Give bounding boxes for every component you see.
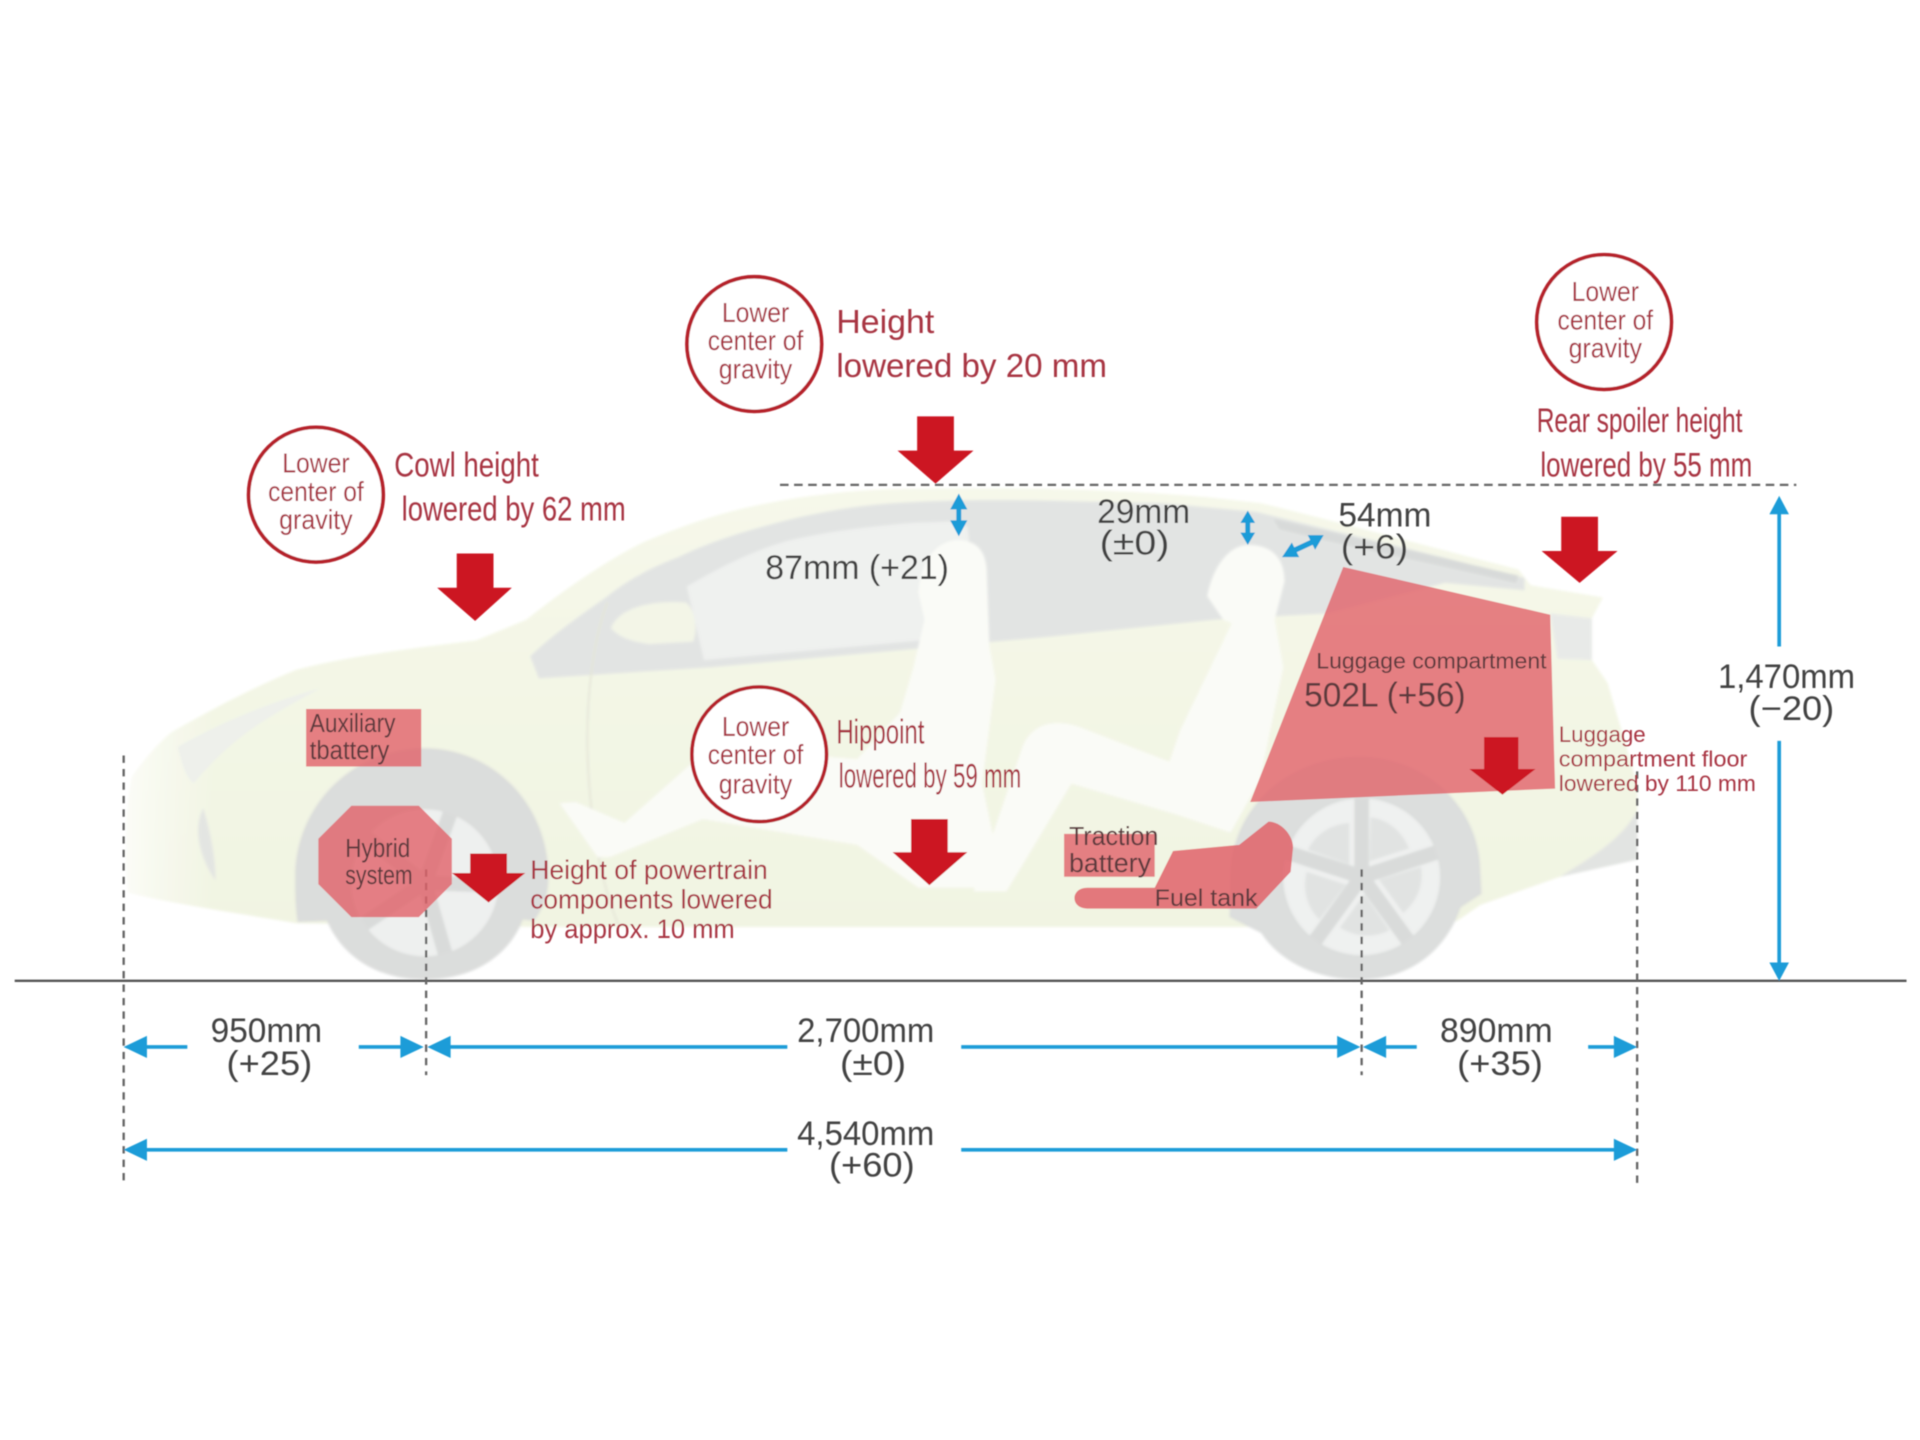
heading line 1: Height <box>836 304 934 341</box>
overall length dimension <box>124 1115 1637 1185</box>
component: hybrid system <box>318 806 452 917</box>
headroom: front <box>765 493 967 587</box>
component: auxiliary battery <box>306 709 421 767</box>
callout: cowl height <box>249 427 626 621</box>
front door line <box>587 602 618 924</box>
diagram group <box>15 255 1907 1185</box>
value: 1,470mm <box>1718 658 1855 696</box>
value: 890mm <box>1440 1012 1553 1050</box>
label: hybrid system: system <box>345 862 413 890</box>
double arrow <box>1240 511 1255 545</box>
badge text: Lower <box>722 297 789 328</box>
heading line 2: lowered by 55 mm <box>1540 446 1752 484</box>
value: (±0) <box>1100 525 1169 563</box>
car: pale side-view silhouette <box>126 488 1637 980</box>
overall height dashed reference <box>780 484 1796 486</box>
badge text: center of <box>1558 304 1653 335</box>
component: traction battery <box>1064 834 1155 877</box>
rear wheel arch and tyre <box>1229 757 1482 980</box>
right arrow <box>1588 1036 1637 1058</box>
value: (+60) <box>829 1147 915 1185</box>
rear wheel <box>1229 757 1482 980</box>
headlamp <box>178 688 321 784</box>
rear knee clearance <box>1282 497 1431 566</box>
heading line 1: Rear spoiler height <box>1537 402 1743 440</box>
value: (+35) <box>1457 1045 1543 1083</box>
lower arrow <box>1769 741 1789 981</box>
heading line 2: lowered by 59 mm <box>839 757 1021 795</box>
callout: rear spoiler height <box>1537 255 1752 583</box>
callout: overall height lowered <box>687 277 1107 484</box>
wheelbase dimension <box>427 1012 1360 1083</box>
value: 29mm <box>1097 493 1190 531</box>
rear bumper shade <box>1560 811 1637 877</box>
front spokes <box>360 811 499 956</box>
dimension guide: rear axle <box>1361 869 1363 1075</box>
right arrow <box>359 1036 424 1058</box>
badge text: gravity <box>719 768 793 799</box>
callout: luggage floor <box>1469 722 1756 796</box>
callout: hip point <box>692 687 1021 885</box>
front overhang dimension <box>124 1012 424 1083</box>
front wheel arch and tyre <box>295 748 549 980</box>
front bumper intake <box>198 808 216 880</box>
dimension guide: front axle <box>425 869 427 1075</box>
tail lamp <box>1550 613 1592 660</box>
front occupant silhouette <box>560 540 1004 888</box>
rear rim pockets <box>1294 809 1437 952</box>
label: traction battery: Traction <box>1069 823 1158 851</box>
heading line 1: Cowl height <box>394 446 539 484</box>
double arrow <box>950 493 967 536</box>
windshield and side glass band <box>530 500 1524 678</box>
callout text: by approx. 10 mm <box>530 914 735 944</box>
rear overhang dimension <box>1363 1012 1637 1083</box>
rear window highlight strip <box>1273 519 1518 583</box>
front wheel <box>295 748 549 980</box>
label: auxiliary battery: tbattery <box>310 737 390 765</box>
badge text: gravity <box>719 353 793 384</box>
callout text: Luggage <box>1559 722 1646 747</box>
red down arrow <box>452 853 525 902</box>
value: 2,700mm <box>797 1012 934 1050</box>
callout text: Height of powertrain <box>530 855 768 885</box>
car body <box>126 488 1637 927</box>
label: traction battery: battery <box>1069 850 1151 878</box>
front rim <box>351 809 498 956</box>
red down arrow <box>1542 517 1618 583</box>
badge text: Lower <box>1572 276 1639 307</box>
rear spokes <box>1285 798 1438 944</box>
side mirror <box>611 602 696 644</box>
front door window <box>687 522 980 660</box>
callout text: lowered by 110 mm <box>1559 771 1756 796</box>
diagonal double arrow <box>1282 535 1324 557</box>
value: (±0) <box>840 1045 906 1083</box>
right arrow <box>961 1139 1637 1161</box>
overall height dimension <box>1718 496 1855 981</box>
badge text: gravity <box>1569 333 1643 364</box>
badge circle <box>1537 255 1671 389</box>
red down arrow <box>437 553 512 621</box>
badge text: Lower <box>722 711 789 742</box>
right arrow <box>961 1036 1360 1058</box>
value: 54mm <box>1338 497 1431 535</box>
badge circle <box>687 277 822 411</box>
rear occupant silhouette <box>973 545 1284 891</box>
label: luggage compartment: Luggage compartment <box>1316 649 1547 674</box>
badge text: center of <box>708 325 803 356</box>
ground line <box>15 980 1907 982</box>
component: fuel tank <box>1074 822 1293 909</box>
red down arrow <box>898 416 973 484</box>
left arrow <box>124 1036 187 1058</box>
label: luggage capacity: 502L (+56) <box>1304 677 1466 715</box>
left arrow <box>427 1036 787 1058</box>
value: (+25) <box>227 1045 312 1083</box>
badge text: center of <box>708 739 803 770</box>
value: (−20) <box>1749 690 1834 728</box>
red down arrow <box>1469 737 1536 795</box>
headroom: rear <box>1097 493 1255 563</box>
badge text: gravity <box>279 504 353 535</box>
dimension guide: rear end <box>1636 771 1638 1184</box>
callout text: compartment floor <box>1559 747 1747 772</box>
component: luggage compartment <box>1250 567 1555 802</box>
label: fuel tank: Fuel tank <box>1155 885 1258 912</box>
value: 950mm <box>211 1012 322 1050</box>
badge circle <box>249 427 383 562</box>
rear rim <box>1283 798 1440 955</box>
value: (+6) <box>1341 528 1408 566</box>
value: 4,540mm <box>797 1115 934 1153</box>
upper arrow <box>1769 496 1789 647</box>
badge text: center of <box>268 476 364 507</box>
left arrow <box>1363 1036 1417 1058</box>
label: hybrid system: Hybrid <box>345 835 410 863</box>
red down arrow <box>893 819 967 885</box>
badge text: Lower <box>282 448 350 479</box>
left arrow <box>124 1139 787 1161</box>
badge circle <box>692 687 827 822</box>
dimension guide: front end <box>123 756 125 1184</box>
heading line 1: Hippoint <box>836 713 925 751</box>
front fade <box>126 620 527 927</box>
value: 87mm (+21) <box>765 549 949 587</box>
heading line 2: lowered by 20 mm <box>836 348 1107 385</box>
callout: powertrain height <box>452 853 773 944</box>
heading line 2: lowered by 62 mm <box>402 490 626 528</box>
label: auxiliary battery: Auxiliary <box>310 710 396 738</box>
callout text: components lowered <box>530 885 773 915</box>
